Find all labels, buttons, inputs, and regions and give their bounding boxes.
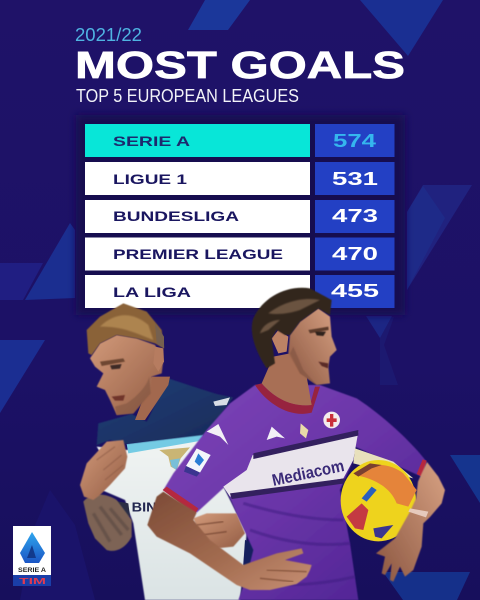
- logo: Serie A badge: [13, 526, 51, 586]
- player: right, Fiorentina striker: [147, 288, 445, 600]
- collar: [255, 383, 320, 414]
- sponsor band: [223, 432, 358, 497]
- scudetto: [300, 423, 308, 438]
- row: Ligue 1: LIGUE 1: [113, 171, 187, 187]
- club badge: [323, 412, 340, 428]
- sponsor text: BIN: [132, 501, 157, 515]
- face: [90, 335, 163, 415]
- logo wordmark: SERIE A: [18, 567, 46, 574]
- row: Bundesliga: [85, 200, 394, 233]
- row: La Liga: 455: [331, 281, 379, 301]
- row: Ligue 1: 531: [332, 169, 378, 189]
- row: La Liga: [85, 275, 394, 308]
- facial features: [100, 358, 151, 415]
- kappa logo: [267, 427, 285, 440]
- row: La Liga: LA LIGA: [113, 284, 191, 300]
- ear: [272, 330, 288, 353]
- shoulder mark: [213, 397, 230, 406]
- jersey folds: [243, 503, 355, 585]
- face: [288, 308, 337, 385]
- cream under-arm band: [353, 448, 413, 478]
- row: Premier League: 470: [332, 244, 378, 264]
- facial features: [290, 327, 329, 385]
- subtitle: TOP 5 EUROPEAN LEAGUES: [76, 86, 299, 106]
- row: Bundesliga: BUNDESLIGA: [113, 208, 239, 224]
- row: Serie A: [85, 124, 394, 157]
- serie a patch: [186, 448, 211, 473]
- waist gap: [243, 540, 255, 565]
- club crest: [159, 447, 190, 470]
- sleeve cuff: [163, 487, 198, 514]
- hand on chest: [80, 440, 127, 500]
- logo sponsor: TIM: [19, 577, 47, 586]
- logo: TIM band: [13, 575, 51, 586]
- main title: MOST GOALS: [75, 45, 405, 87]
- logo: Serie A shield: [20, 532, 45, 563]
- ear: [153, 347, 164, 372]
- hair: [87, 303, 164, 355]
- row: Serie A: SERIE A: [113, 133, 190, 149]
- neck: [135, 377, 170, 420]
- row: Bundesliga: 473: [332, 206, 378, 226]
- panel: league goals table: [76, 115, 405, 315]
- hand at waist: [193, 513, 245, 548]
- row: Premier League: PREMIER LEAGUE: [113, 246, 283, 262]
- ball: [341, 460, 417, 541]
- row: Premier League: [85, 238, 394, 270]
- row: Serie A: 574: [333, 131, 376, 151]
- navy yoke: [97, 378, 233, 445]
- tattooed forearm: [83, 495, 132, 551]
- sponsor: Mediacom: Mediacom: [270, 456, 346, 490]
- wrist tape: [408, 508, 428, 517]
- hair: [252, 288, 332, 368]
- neck: [262, 353, 312, 405]
- jersey: [163, 385, 427, 600]
- player: left, Lazio striker: [80, 303, 247, 600]
- white shirt: [97, 434, 247, 600]
- far arm and hand: [376, 462, 445, 582]
- front arm and hand: [147, 492, 312, 590]
- season label: 2021/22: [75, 25, 142, 45]
- row: Ligue 1: [85, 162, 394, 195]
